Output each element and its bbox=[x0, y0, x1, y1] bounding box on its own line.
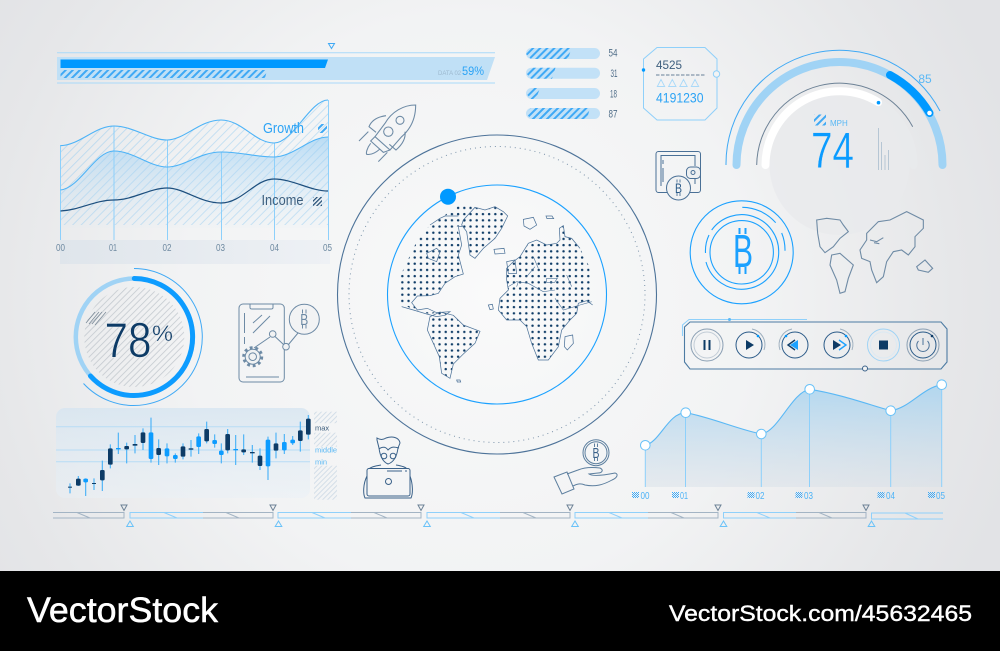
north america outline bbox=[402, 216, 463, 317]
percentage donut: % bbox=[152, 321, 173, 346]
area chart: growth and income: Income bbox=[262, 192, 304, 209]
continent: greenland bbox=[462, 207, 508, 258]
area chart: growth and income: 03 bbox=[216, 243, 225, 254]
area chart: growth and income: 01 bbox=[109, 243, 117, 254]
line chart with markers: 04 bbox=[886, 490, 895, 502]
bodies dark bbox=[68, 419, 311, 488]
button: rewind bbox=[779, 329, 808, 358]
islands bbox=[457, 216, 573, 382]
speed gauge: MPH bbox=[830, 119, 848, 128]
bitcoin emblem: B bbox=[733, 225, 753, 277]
button: forward bbox=[824, 329, 853, 358]
candlestick chart bbox=[56, 408, 337, 500]
button: play bbox=[736, 329, 765, 358]
area chart: growth and income: 04 bbox=[270, 243, 279, 254]
area chart: growth and income: 05 bbox=[323, 243, 332, 254]
globe with dotted world map bbox=[338, 135, 656, 454]
icon: phone with gear and bitcoin: B bbox=[300, 312, 308, 329]
continent: eurasia and africa fill bbox=[498, 226, 591, 360]
speed gauge bbox=[726, 50, 942, 235]
icon: wallet with bitcoin bbox=[656, 152, 700, 200]
small world map outline bbox=[817, 212, 933, 293]
icon: hand holding bitcoin: B bbox=[592, 445, 600, 462]
hatched mini bars: 31 bbox=[610, 68, 618, 80]
media control panel bbox=[682, 318, 947, 371]
line chart with markers: 03 bbox=[804, 490, 813, 502]
footer bar: VectorStock.com/45632465 bbox=[669, 601, 972, 626]
bodies blue bbox=[83, 432, 295, 482]
hatched mini bars: 54 bbox=[608, 48, 618, 60]
button: power bbox=[907, 329, 939, 361]
eurasia and africa outline bbox=[498, 226, 593, 360]
progress panel bbox=[57, 44, 495, 83]
hatched mini bars: 18 bbox=[610, 88, 617, 100]
octagon data readout: 4191230 bbox=[656, 90, 704, 106]
icon: wallet with bitcoin: B bbox=[675, 180, 682, 196]
candlestick chart: max bbox=[315, 424, 329, 432]
icon: phone with gear and bitcoin bbox=[239, 304, 319, 382]
bitcoin emblem bbox=[690, 201, 793, 304]
progress panel: 59% bbox=[462, 64, 484, 78]
area chart: growth and income: 00 bbox=[56, 243, 65, 254]
footer bar bbox=[0, 571, 1000, 651]
line chart with markers: 02 bbox=[756, 490, 765, 502]
hatched mini bars: 87 bbox=[608, 108, 618, 120]
line chart with markers bbox=[632, 380, 946, 502]
line chart with markers: 05 bbox=[936, 490, 945, 502]
octagon data readout bbox=[642, 48, 720, 120]
icon: rocket bbox=[359, 105, 416, 162]
timeline strip bbox=[53, 505, 943, 526]
icon: person with laptop bbox=[364, 437, 412, 498]
continent: south america bbox=[427, 312, 480, 378]
button: pause bbox=[691, 329, 723, 361]
area chart: growth and income: Growth bbox=[263, 120, 304, 137]
icon: hand holding bitcoin bbox=[554, 440, 617, 494]
percentage donut bbox=[76, 268, 202, 405]
footer bar: VectorStock bbox=[27, 591, 219, 630]
speed gauge: 85 bbox=[918, 72, 932, 86]
speed gauge: 74 bbox=[811, 122, 854, 179]
continent: north america fill bbox=[401, 205, 475, 314]
area chart: growth and income bbox=[56, 100, 332, 264]
progress panel: DATA 02 bbox=[438, 71, 462, 77]
area chart: growth and income: 02 bbox=[162, 243, 172, 254]
candlestick chart: middle bbox=[315, 446, 337, 454]
candlestick chart: min bbox=[315, 458, 327, 466]
line chart with markers: 01 bbox=[680, 490, 688, 502]
octagon data readout: 4525 bbox=[656, 58, 682, 72]
wicks blue bbox=[70, 415, 308, 496]
percentage donut: 78 bbox=[104, 314, 152, 368]
line chart with markers: 00 bbox=[640, 490, 650, 502]
button: stop bbox=[868, 329, 900, 361]
hatched mini bars bbox=[526, 48, 618, 120]
